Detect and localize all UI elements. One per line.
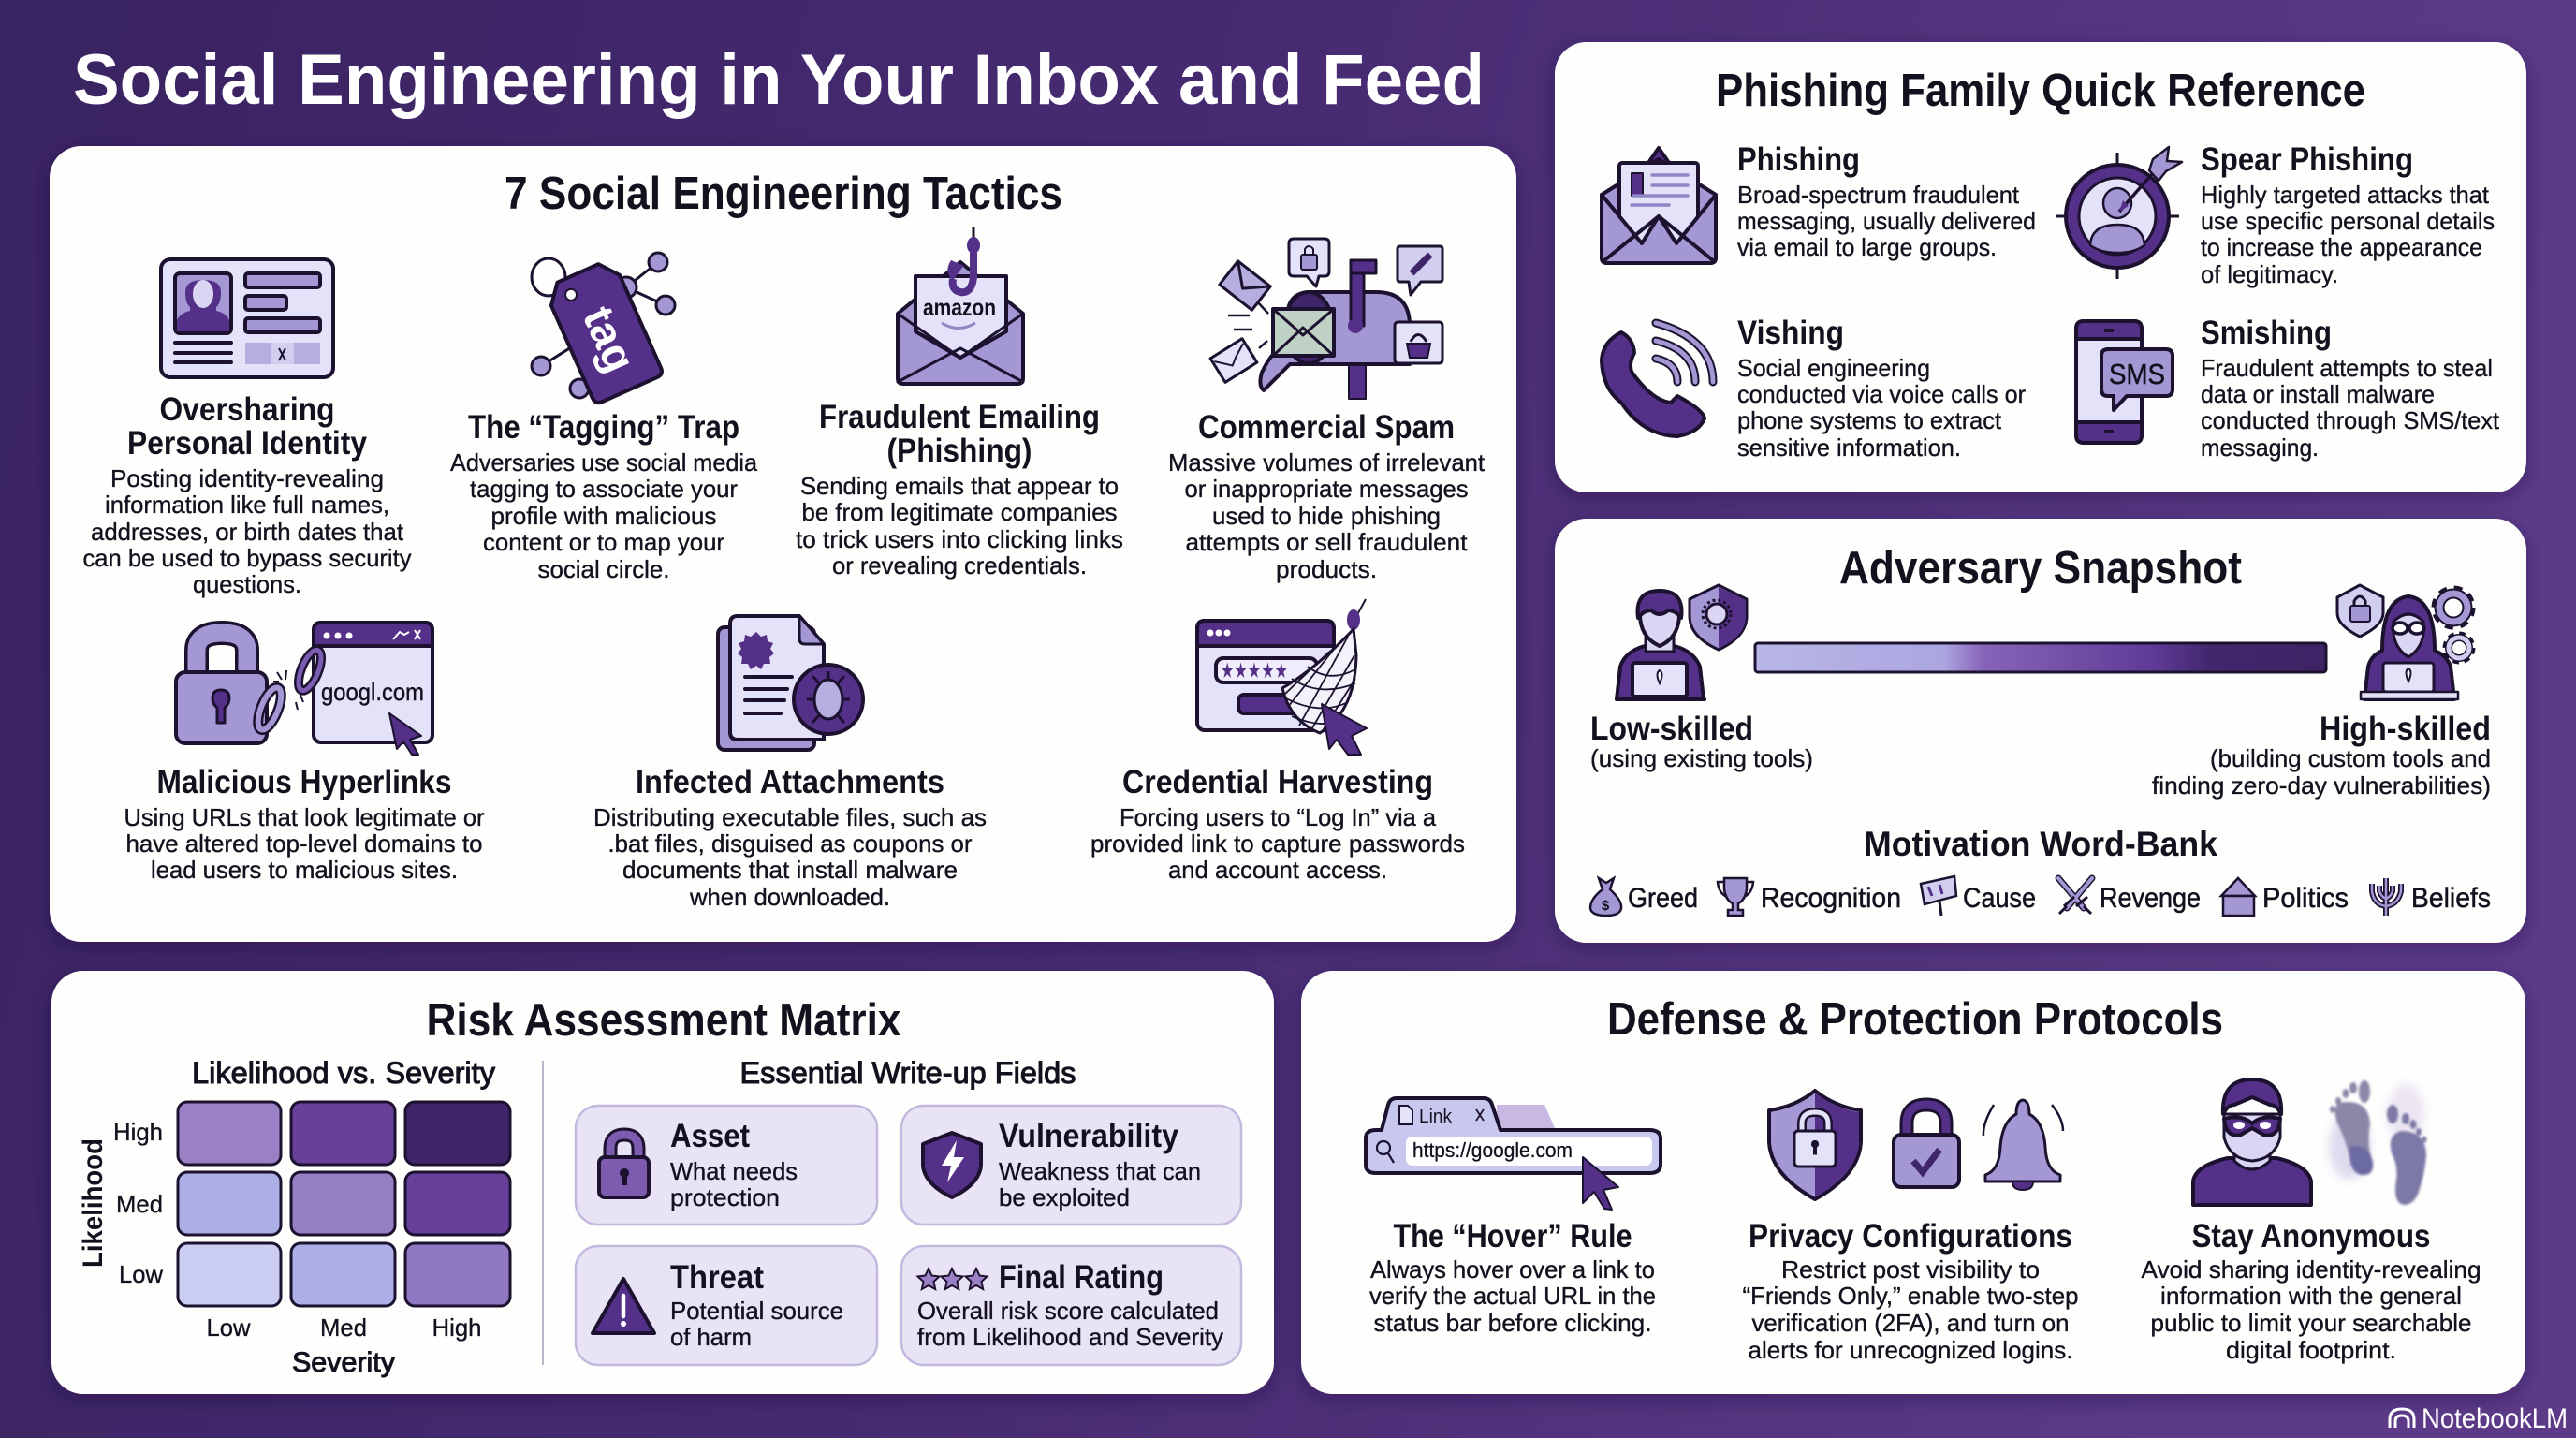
column labels: Med: [320, 1313, 367, 1342]
description: [917, 1297, 1223, 1351]
icon: padlock: [599, 1135, 649, 1197]
heading: The “Hover” Rule: [1393, 1218, 1632, 1255]
description: from Likelihood and Severity: [917, 1323, 1223, 1351]
motivation: greed: $: [1602, 898, 1610, 914]
icon: smartphone with SMS bubble: SMS: [2109, 358, 2165, 390]
description: have altered top-level domains to: [125, 829, 483, 858]
motivation: recognition: Recognition: [1761, 883, 1901, 914]
description: [1743, 1255, 2078, 1364]
description: be exploited: [999, 1183, 1130, 1211]
label: Asset: [670, 1118, 750, 1154]
icon: low-skilled adversary: [1617, 585, 1747, 699]
low-skilled label: Low-skilled: [1590, 711, 1753, 747]
description: sensitive information.: [1737, 433, 1961, 462]
card: asset: [576, 1106, 877, 1225]
description: addresses, or birth dates that: [91, 518, 404, 546]
tactic: fraudulent emailing: [796, 227, 1123, 580]
subheading: motivation word-bank: Motivation Word-Bank: [1864, 825, 2217, 863]
heading: Infected Attachments: [636, 764, 944, 800]
row labels: Low: [119, 1260, 163, 1288]
motivation: greed: Greed: [1628, 883, 1698, 914]
card: vulnerability: [901, 1106, 1241, 1225]
item: smishing: [2076, 315, 2500, 462]
heading: Phishing Family Quick Reference: [1716, 66, 2365, 116]
description: and account access.: [1168, 856, 1387, 884]
description: Highly targeted attacks that: [2201, 181, 2490, 209]
description: [1090, 803, 1465, 884]
icon: hooked envelope: [898, 227, 1023, 384]
motivation: revenge: [2058, 878, 2201, 914]
tactic: commercial spam: [1168, 239, 1486, 583]
description: provided link to capture passwords: [1090, 829, 1465, 858]
description: [1737, 181, 2036, 261]
description: attempts or sell fraudulent: [1185, 528, 1468, 556]
icon: phone with waves: [1602, 323, 1713, 436]
panel: phishing family quick reference: [1555, 42, 2526, 492]
icon: hooked envelope: amazon: [923, 295, 996, 321]
description: [670, 1157, 798, 1211]
motivation: beliefs: Beliefs: [2411, 883, 2491, 914]
icon: shield lock: [1769, 1091, 1861, 1199]
row labels: [113, 1118, 163, 1288]
motivation: beliefs: [2372, 878, 2491, 916]
matrix cells: [178, 1102, 510, 1306]
heading: Personal Identity: [127, 425, 367, 462]
description: information like full names,: [105, 491, 389, 519]
name: Vishing: [1737, 315, 1844, 351]
gradient skill bar: [1755, 643, 2326, 672]
heading: tactics: 7 Social Engineering Tactics: [505, 169, 1062, 219]
axis label: severity: Severity: [292, 1347, 395, 1378]
motivation: revenge: Revenge: [2100, 883, 2201, 914]
description: alerts for unrecognized logins.: [1749, 1336, 2072, 1364]
description: [999, 1157, 1201, 1211]
description: .bat files, disguised as coupons or: [608, 829, 973, 858]
panel: risk assessment matrix: [51, 971, 1274, 1394]
description: conducted through SMS/text: [2201, 406, 2500, 434]
description: or revealing credentials.: [832, 551, 1087, 580]
low-skilled label: (using existing tools): [1590, 744, 1813, 772]
description: use specific personal details: [2201, 207, 2495, 235]
heading: Adversary Snapshot: [1839, 543, 2242, 594]
panel: defense and protection protocols: [1301, 971, 2525, 1394]
protocol: stay anonymous: [2142, 1079, 2481, 1364]
high-skilled label: [2152, 711, 2491, 800]
heading: Risk Assessment Matrix: [427, 995, 900, 1046]
description: [124, 803, 485, 884]
description: “Friends Only,” enable two-step: [1743, 1282, 2078, 1310]
description: [796, 472, 1123, 580]
motivation: cause: [1921, 876, 2036, 916]
description: content or to map your: [483, 528, 724, 556]
icon: infected document: [718, 616, 863, 750]
chart: likelihood vs severity matrix: [78, 1056, 510, 1378]
motivation: politics: [2221, 878, 2349, 916]
tactic: infected attachments: [593, 616, 987, 911]
item: vishing: [1602, 315, 2026, 462]
description: questions.: [193, 570, 301, 598]
high-skilled label: High-skilled: [2320, 711, 2491, 747]
description: verification (2FA), and turn on: [1752, 1309, 2069, 1337]
description: [593, 803, 987, 911]
description: What needs: [670, 1157, 798, 1185]
tactic: credential harvesting: [1090, 599, 1465, 884]
description: social circle.: [537, 555, 670, 583]
description: Overall risk score calculated: [917, 1297, 1219, 1325]
low-skilled label: [1590, 711, 1813, 772]
heading: Fraudulent Emailing: [819, 399, 1100, 435]
description: via email to large groups.: [1737, 233, 1997, 261]
icon: browser address bar with cursor: Link: [1419, 1107, 1453, 1127]
high-skilled label: finding zero-day vulnerabilities): [2152, 771, 2491, 800]
tactic: oversharing personal identity: [82, 259, 412, 598]
icon: ID card: [161, 259, 333, 377]
description: Distributing executable files, such as: [593, 803, 987, 831]
description: Restrict post visibility to: [1781, 1255, 2040, 1284]
heading: Credential Harvesting: [1122, 764, 1433, 800]
label: Final Rating: [999, 1259, 1164, 1296]
title: Social Engineering in Your Inbox and Feed: [73, 40, 1485, 120]
description: [2142, 1255, 2481, 1364]
description: protection: [670, 1183, 780, 1211]
description: [2201, 181, 2495, 288]
description: digital footprint.: [2226, 1336, 2396, 1364]
description: can be used to bypass security: [82, 544, 412, 572]
description: [2201, 354, 2500, 462]
label: Vulnerability: [999, 1118, 1178, 1154]
icon: tag with network: tag: [574, 299, 646, 379]
icon: padlock with check: [1894, 1105, 1959, 1187]
row labels: High: [113, 1118, 163, 1146]
heading: (Phishing): [887, 433, 1032, 469]
description: Massive volumes of irrelevant: [1168, 448, 1486, 477]
description: of harm: [670, 1323, 752, 1351]
description: verify the actual URL in the: [1369, 1282, 1656, 1310]
motivation: recognition: [1718, 878, 1901, 916]
description: to increase the appearance: [2201, 233, 2482, 261]
heading: [819, 399, 1100, 469]
description: status bar before clicking.: [1374, 1309, 1651, 1337]
tactic: the tagging trap: [450, 253, 758, 583]
label: Threat: [670, 1259, 764, 1296]
description: Weakness that can: [999, 1157, 1201, 1185]
description: documents that install malware: [622, 856, 958, 884]
protocol: privacy configurations: [1743, 1091, 2078, 1364]
description: when downloaded.: [689, 883, 890, 911]
motivation: cause: Cause: [1963, 883, 2036, 914]
description: Broad-spectrum fraudulent: [1737, 181, 2020, 209]
description: [1168, 448, 1486, 583]
column labels: Low: [206, 1313, 251, 1342]
description: Using URLs that look legitimate or: [124, 803, 485, 831]
column labels: [206, 1313, 481, 1342]
name: Spear Phishing: [2201, 141, 2413, 178]
card: final rating: [901, 1246, 1241, 1365]
description: Potential source: [670, 1297, 843, 1325]
motivation: greed: [1590, 878, 1698, 916]
description: to trick users into clicking links: [796, 525, 1123, 553]
description: Avoid sharing identity-revealing: [2142, 1255, 2481, 1284]
axis label: likelihood: Likelihood: [78, 1138, 109, 1268]
icon: browser address bar with cursor: https://google.com: [1412, 1138, 1573, 1162]
description: Forcing users to “Log In” via a: [1120, 803, 1437, 831]
icon: login form and net: ★★★★★: [1221, 658, 1288, 682]
description: profile with malicious: [490, 502, 717, 530]
description: conducted via voice calls or: [1737, 380, 2026, 408]
icon: smartphone with SMS bubble: [2076, 321, 2173, 443]
description: Social engineering: [1737, 354, 1930, 382]
description: Fraudulent attempts to steal: [2201, 354, 2493, 382]
icon: fading footprints: [2329, 1080, 2426, 1205]
description: Sending emails that appear to: [800, 472, 1119, 500]
tactic: malicious hyperlinks: [124, 623, 485, 884]
high-skilled label: (building custom tools and: [2210, 744, 2491, 772]
icon: target and arrow: [2056, 147, 2182, 279]
description: Always hover over a link to: [1370, 1255, 1655, 1284]
panel: 7 social engineering tactics: [50, 146, 1516, 942]
name: Phishing: [1737, 141, 1860, 178]
description: of legitimacy.: [2201, 260, 2338, 288]
description: Posting identity-revealing: [110, 464, 384, 492]
heading: Privacy Configurations: [1749, 1218, 2072, 1255]
icon: browser address bar with cursor: [1366, 1098, 1661, 1210]
description: [1369, 1255, 1656, 1337]
description: lead users to malicious sites.: [151, 856, 458, 884]
icon: login form and net: [1197, 599, 1367, 755]
protocol: hover rule: [1366, 1098, 1661, 1337]
description: or inappropriate messages: [1185, 475, 1468, 503]
description: information with the general: [2160, 1282, 2462, 1310]
icon: lock, broken chain and browser: [176, 623, 432, 755]
icon: tag with network: [532, 253, 675, 404]
icon: masked person: [2193, 1079, 2311, 1205]
heading: Stay Anonymous: [2192, 1218, 2430, 1255]
heading: Commercial Spam: [1198, 409, 1455, 446]
item: phishing: [1602, 141, 2036, 263]
heading: [127, 391, 367, 462]
description: used to hide phishing: [1212, 502, 1441, 530]
icon: cracked shield: [923, 1133, 981, 1197]
description: [82, 464, 412, 598]
heading: Defense & Protection Protocols: [1607, 994, 2223, 1045]
subheading: essential write-up fields: Essential Write-up Fields: [739, 1056, 1076, 1090]
heading: The “Tagging” Trap: [468, 409, 739, 446]
description: [1737, 354, 2026, 462]
description: data or install malware: [2201, 380, 2435, 408]
icon: three stars: [917, 1269, 987, 1289]
item: spear phishing: [2056, 141, 2495, 288]
icon: lock, broken chain and browser: googl.com: [321, 678, 424, 706]
description: [450, 448, 758, 583]
heading: Oversharing: [159, 391, 335, 428]
icon: high-skilled adversary: [2337, 585, 2472, 699]
description: phone systems to extract: [1737, 406, 2002, 434]
panel: adversary snapshot: [1555, 519, 2526, 943]
heading: Malicious Hyperlinks: [157, 764, 451, 800]
row labels: Med: [116, 1190, 163, 1218]
icon: open envelope: [1602, 148, 1716, 263]
name: Smishing: [2201, 315, 2332, 351]
chart title: Likelihood vs. Severity: [192, 1056, 495, 1090]
description: products.: [1276, 555, 1377, 583]
description: public to limit your searchable: [2151, 1309, 2471, 1337]
icon: alert bell: [1983, 1100, 2063, 1190]
icon: overflowing mailbox: [1210, 239, 1442, 399]
column labels: High: [432, 1313, 481, 1342]
description: messaging, usually delivered: [1737, 207, 2036, 235]
description: Adversaries use social media: [450, 448, 758, 477]
description: be from legitimate companies: [801, 498, 1118, 526]
description: [670, 1297, 843, 1351]
icon: warning triangle: [593, 1279, 654, 1333]
motivation: politics: Politics: [2262, 883, 2349, 914]
description: messaging.: [2201, 433, 2319, 462]
description: tagging to associate your: [470, 475, 738, 503]
card: threat: [576, 1246, 877, 1365]
